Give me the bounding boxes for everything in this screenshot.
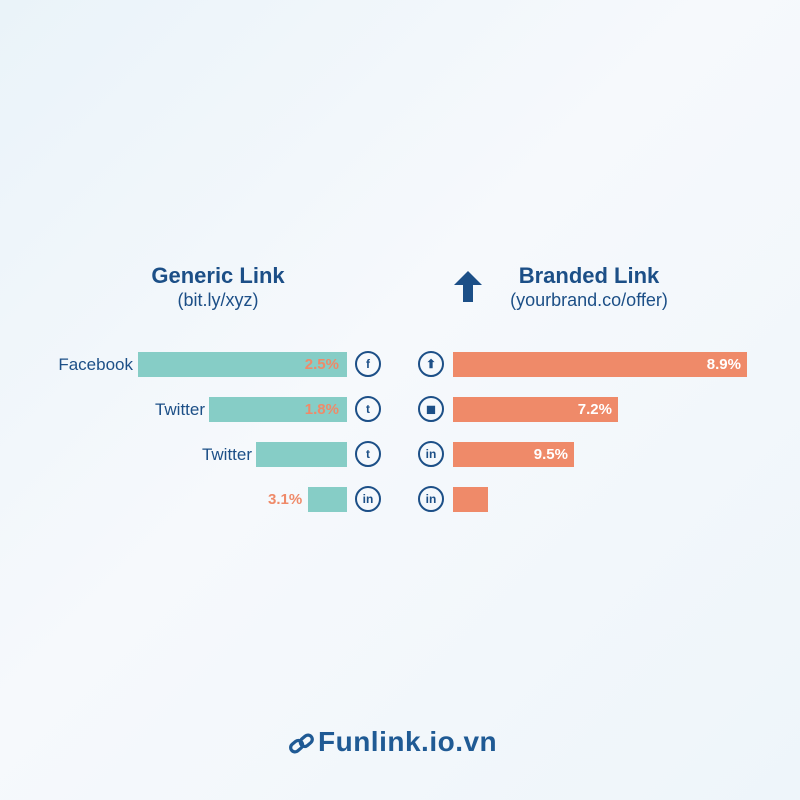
- icons: branded: [418, 351, 444, 512]
- title: generic link: (bit.ly/xyz): [178, 290, 258, 310]
- icons: generic: f: [366, 357, 370, 371]
- icons: generic: [355, 351, 381, 512]
- title: branded link: (yourbrand.co/offer): [510, 290, 668, 310]
- panel: generic bars: 1.8%: [305, 401, 339, 418]
- panel: branded bars: [453, 352, 747, 512]
- panel: generic bars: Twitter: [155, 400, 205, 419]
- panel: branded bars: 7.2%: [578, 401, 612, 418]
- icons: generic: t: [366, 402, 370, 416]
- title: generic link: [151, 263, 285, 310]
- icons: branded: in: [426, 492, 436, 506]
- icons: generic: in: [363, 492, 373, 506]
- panel: generic bars: Twitter: [202, 445, 252, 464]
- title: branded link: [454, 263, 668, 310]
- icon: link: [289, 734, 314, 754]
- panel: generic bars: Facebook: [58, 355, 133, 374]
- panel: generic bars: 2.5%: [305, 356, 339, 373]
- icons: branded: ⬆: [426, 357, 436, 371]
- icons: generic: t: [366, 447, 370, 461]
- icons: branded: in: [426, 447, 436, 461]
- footer logo: Funlink.io.vn: [318, 726, 497, 757]
- panel: branded bars: 9.5%: [534, 446, 568, 463]
- icon: up arrow: [454, 271, 482, 302]
- panel: generic bars: [58, 352, 347, 512]
- icons: branded: ◼: [426, 402, 436, 416]
- panel: branded bars: 8.9%: [707, 356, 741, 373]
- title: branded link: Branded Link: [519, 263, 659, 288]
- title: generic link: Generic Link: [151, 263, 285, 288]
- panel: generic bars: 3.1%: [268, 491, 302, 508]
